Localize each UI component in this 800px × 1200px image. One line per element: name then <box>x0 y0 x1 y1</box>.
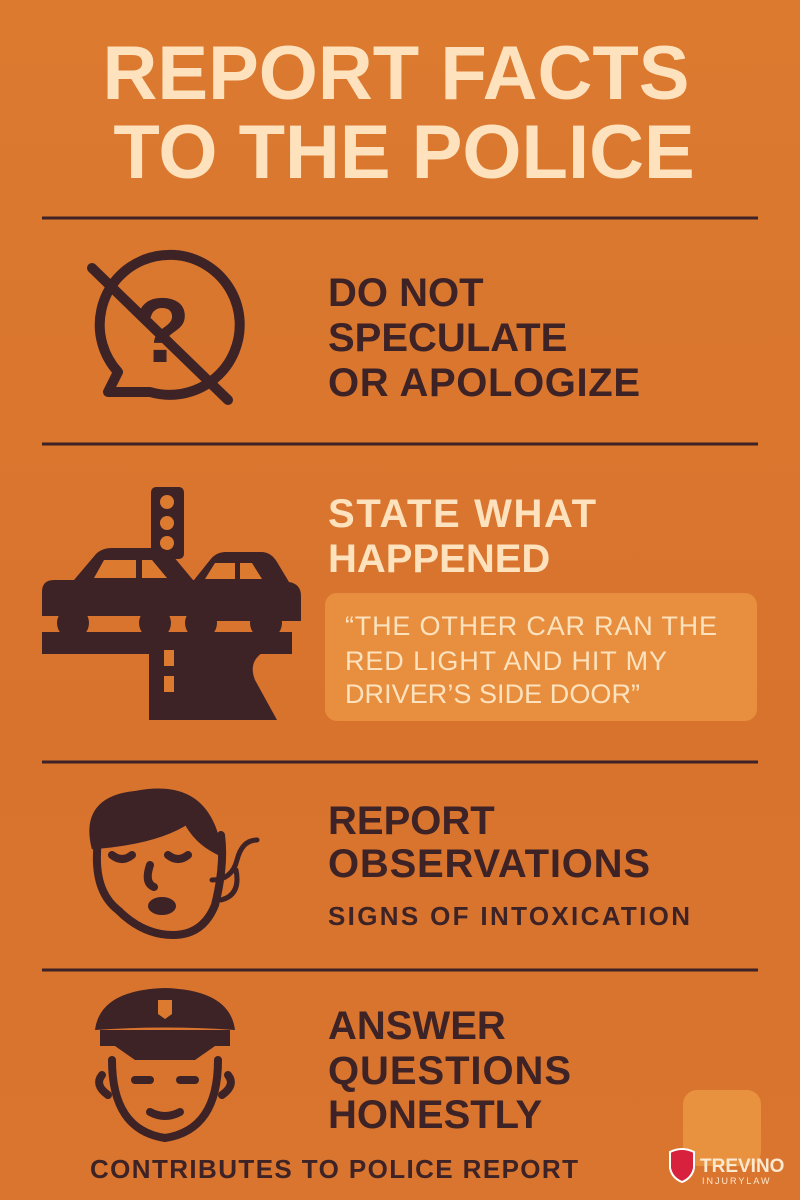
text: heading <box>328 799 650 886</box>
logo <box>670 1149 784 1186</box>
icon: crossed question bubble: ? <box>134 280 190 382</box>
callout: quote: RED LIGHT AND HIT MY <box>345 646 667 676</box>
icon: police officer <box>95 988 235 1060</box>
logo: INJURYLAW <box>702 1176 772 1186</box>
text: heading: OBSERVATIONS <box>328 842 650 886</box>
text: heading: DO NOT <box>328 271 484 315</box>
title: REPORT FACTS <box>103 31 689 116</box>
panel: state what happened <box>42 487 757 721</box>
callout: quote: “THE OTHER CAR RAN THE <box>345 611 717 641</box>
icon: face <box>93 792 257 935</box>
icon: car crash <box>42 487 301 720</box>
icon: crossed question bubble <box>92 255 240 400</box>
text: heading: QUESTIONS <box>328 1049 571 1093</box>
title <box>103 31 695 195</box>
title: TO THE POLICE <box>113 110 695 195</box>
footer text: CONTRIBUTES TO POLICE REPORT <box>90 1154 578 1184</box>
text: heading: SPECULATE <box>328 316 567 360</box>
panel: report observations <box>93 792 690 935</box>
text: heading <box>328 1004 571 1137</box>
text: heading: HONESTLY <box>328 1093 542 1137</box>
text: heading: STATE WHAT <box>328 492 596 536</box>
text: heading: HAPPENED <box>328 537 550 581</box>
decorative square <box>683 1090 761 1166</box>
text: heading <box>328 271 640 405</box>
text: heading <box>328 492 596 581</box>
panel: do not speculate <box>92 255 640 405</box>
callout: quote <box>325 593 757 721</box>
panel: answer questions <box>95 988 571 1138</box>
text: heading: REPORT <box>328 799 495 843</box>
text: sub: SIGNS OF INTOXICATION <box>328 901 690 931</box>
callout: quote: DRIVER’S SIDE DOOR” <box>345 679 640 709</box>
text: heading: ANSWER <box>328 1004 506 1048</box>
logo: TREVINO <box>700 1156 784 1177</box>
text: heading: OR APOLOGIZE <box>328 361 640 405</box>
